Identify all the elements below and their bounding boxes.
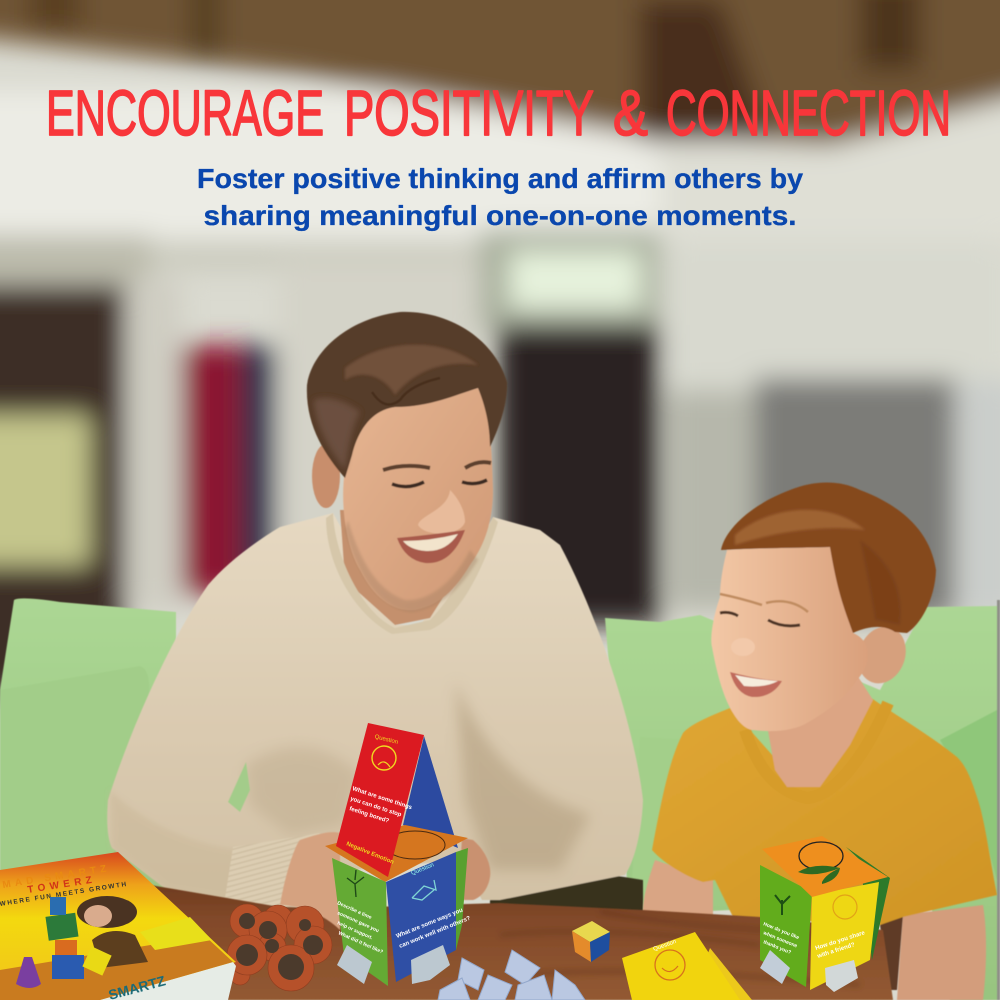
game box bbox=[0, 852, 236, 1000]
blue front card bbox=[386, 852, 456, 982]
man with sweater bbox=[107, 312, 643, 912]
subtitle: sharing meaningful one-on-one moments. bbox=[204, 200, 796, 231]
green sofa bbox=[0, 598, 1000, 1000]
ear bbox=[312, 444, 340, 508]
green card text bbox=[336, 900, 384, 955]
subtitle: Foster positive thinking and affirm others by bbox=[197, 163, 804, 194]
hair bbox=[721, 482, 936, 633]
nose bbox=[418, 490, 465, 534]
left card tower: can work well with others? bbox=[399, 916, 472, 950]
green card text: What did it feel like? bbox=[337, 930, 384, 955]
face bbox=[711, 547, 868, 731]
right card tower: with a friend? bbox=[816, 942, 856, 960]
title: ENCOURAGE bbox=[46, 77, 324, 149]
smiley bbox=[833, 895, 857, 919]
stubble bbox=[345, 520, 478, 612]
left card tower: Question bbox=[374, 734, 399, 746]
box character bbox=[77, 896, 137, 928]
dark gap bbox=[880, 915, 903, 990]
neck bbox=[340, 510, 480, 625]
right card tower: How do you like bbox=[762, 921, 800, 941]
sweater shading bbox=[245, 747, 360, 835]
eyes bbox=[392, 482, 424, 487]
collar bbox=[326, 513, 498, 634]
left card tower: What are some things bbox=[351, 786, 413, 811]
handshake icon bbox=[412, 880, 436, 900]
hair bbox=[307, 312, 507, 478]
face bbox=[343, 388, 493, 610]
orange platform bbox=[325, 825, 468, 882]
red card bbox=[336, 723, 424, 877]
blue roof card bbox=[403, 736, 458, 848]
blue card text: What are some ways you bbox=[396, 907, 464, 940]
tree icon bbox=[347, 870, 364, 897]
t-shirt bbox=[652, 697, 997, 925]
left arm bbox=[643, 860, 713, 915]
left card tower bbox=[325, 723, 472, 986]
mouth bbox=[397, 530, 465, 563]
left card tower: you can do to stop bbox=[349, 796, 402, 818]
right card tower: when someone bbox=[761, 930, 798, 949]
right card tower: How do you share bbox=[815, 930, 866, 952]
green card text: Describe a time bbox=[336, 900, 373, 921]
green side card bbox=[332, 858, 388, 986]
game box: TOWERZ bbox=[27, 875, 93, 896]
neck bbox=[753, 675, 873, 787]
title bbox=[46, 77, 951, 149]
left card tower: Question bbox=[411, 862, 435, 877]
mouth bbox=[730, 672, 782, 697]
right arm bbox=[897, 905, 986, 1000]
left card tower: Negative Emotion bbox=[345, 841, 395, 866]
token pile bbox=[227, 904, 332, 991]
yellow cards on table bbox=[622, 932, 752, 1000]
title: POSITIVITY bbox=[344, 77, 594, 149]
game box: MAD SMARTZ bbox=[2, 864, 107, 891]
loose clear card stands bbox=[438, 950, 585, 1000]
green card text: someone gave you bbox=[336, 910, 380, 934]
boy with mustard t-shirt bbox=[643, 482, 997, 1000]
nose bbox=[731, 638, 755, 656]
man's hands bbox=[280, 832, 490, 930]
subtitle bbox=[197, 163, 804, 231]
game die bbox=[572, 921, 610, 962]
red card smiley bbox=[372, 746, 396, 770]
sweater bbox=[107, 513, 643, 910]
stands bbox=[760, 950, 790, 984]
left card tower: feeling bored? bbox=[348, 806, 390, 825]
right card tower bbox=[760, 836, 890, 992]
leaf icon bbox=[799, 842, 843, 870]
title: & bbox=[613, 77, 648, 149]
trousers bbox=[490, 870, 643, 912]
yellow cards on table: Question bbox=[653, 939, 677, 953]
tree icon bbox=[775, 895, 790, 915]
right card tower: thanks you? bbox=[762, 939, 792, 956]
green card text: help or support. bbox=[336, 920, 374, 942]
eyes bbox=[720, 612, 738, 616]
wooden table bbox=[150, 885, 893, 1000]
ear bbox=[850, 620, 914, 690]
game box: WHERE FUN MEETS GROWTH bbox=[0, 881, 127, 908]
clear stands bbox=[337, 945, 372, 984]
